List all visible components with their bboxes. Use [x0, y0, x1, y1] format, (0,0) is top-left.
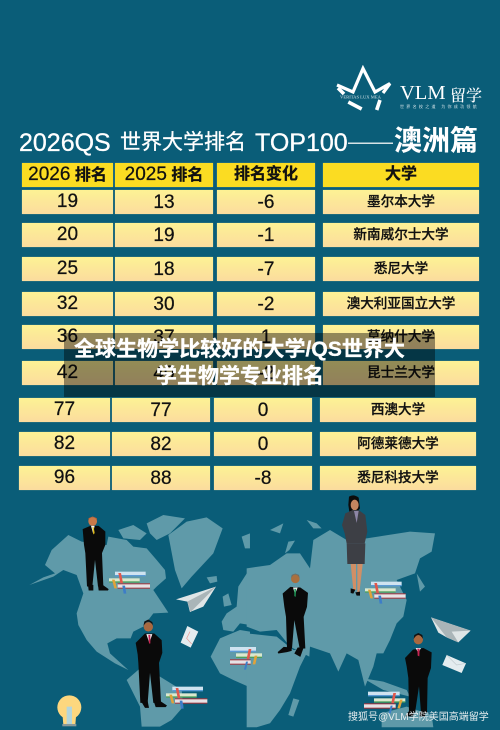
row: 澳大利亚国立大学: 30 [153, 294, 175, 315]
book stack 2 [166, 687, 207, 709]
overlay caption [64, 333, 435, 397]
row: 莫纳什大学: 37 [153, 327, 175, 348]
row: 澳大利亚国立大学: -2 [258, 294, 274, 315]
icon: light bulb [57, 695, 81, 726]
logo tagline: 世界名校之道 为你成功领航 [400, 104, 479, 109]
logo star mark [336, 65, 392, 111]
icon: envelope [442, 655, 466, 673]
row: 悉尼科技大学: 悉尼科技大学 [357, 470, 439, 485]
row: 悉尼大学: 悉尼大学 [374, 261, 428, 276]
icon: paper plane left [176, 587, 216, 612]
figure: man top left [83, 516, 109, 590]
row: 西澳大学: 0 [258, 400, 268, 421]
title: TOP100 [255, 129, 348, 157]
figure: woman [342, 495, 367, 596]
row: 墨尔本大学: 13 [153, 192, 175, 213]
logo star mark: VERITAS LUX MEA [340, 94, 382, 100]
row: 昆士兰大学: 40 [153, 363, 175, 384]
row: 西澳大学: 西澳大学 [371, 402, 425, 417]
row: 阿德莱德大学: 0 [258, 434, 268, 455]
row: 悉尼大学: 18 [153, 259, 175, 280]
row: 悉尼科技大学: 96 [54, 467, 75, 488]
table header: 2025 排名 [125, 164, 203, 185]
title: 世界大学排名 [120, 131, 246, 154]
book stack 4 [365, 582, 406, 604]
row: 西澳大学 [18, 398, 476, 422]
row: 澳大利亚国立大学 [22, 292, 480, 316]
overlay caption: 全球生物学比较好的大学/QS世界大 [74, 338, 405, 361]
row: 悉尼大学: -7 [258, 259, 274, 280]
book stack 5 [364, 692, 405, 714]
row: 西澳大学: 77 [150, 400, 172, 421]
table header: 大学 [385, 166, 417, 183]
row: 昆士兰大学: -2 [258, 363, 274, 384]
logo: VLM [336, 65, 482, 111]
row: 莫纳什大学: 莫纳什大学 [367, 329, 435, 344]
row: 阿德莱德大学: 82 [150, 434, 172, 455]
title: 2026QS [19, 129, 111, 157]
row: 新南威尔士大学: 20 [57, 224, 78, 245]
row: 昆士兰大学: 昆士兰大学 [367, 365, 435, 380]
watermark: 搜狐号@VLM学院美国高端留学 [348, 712, 489, 723]
row: 悉尼科技大学 [18, 466, 476, 490]
row: 悉尼大学: 25 [57, 258, 78, 279]
row: 阿德莱德大学: 阿德莱德大学 [357, 436, 439, 451]
row: 墨尔本大学 [22, 190, 480, 214]
row: 悉尼科技大学: -8 [255, 468, 271, 489]
row: 新南威尔士大学: 19 [153, 225, 175, 246]
map: world continents [29, 515, 435, 727]
table header: 2026 排名 [28, 164, 107, 185]
title: —— [348, 129, 393, 154]
row: 莫纳什大学 [22, 324, 480, 350]
row: 澳大利亚国立大学: 32 [57, 293, 78, 314]
icon: paper plane right [431, 617, 471, 642]
row: 昆士兰大学: 42 [57, 362, 78, 383]
row: 阿德莱德大学 [18, 432, 476, 456]
figure: man bottom right [405, 633, 432, 716]
row: 昆士兰大学 [22, 360, 480, 386]
book stack 1 [109, 572, 150, 594]
title [19, 125, 478, 157]
row: 墨尔本大学: 墨尔本大学 [367, 194, 435, 209]
table header: 排名变化 [234, 166, 298, 183]
row: 悉尼科技大学: 88 [150, 468, 172, 489]
row: 莫纳什大学: 36 [57, 326, 78, 347]
logo wordmark: VLM [400, 82, 446, 104]
row: 新南威尔士大学 [22, 222, 480, 248]
table header [22, 162, 480, 188]
overlay caption: 学生物学专业排名 [156, 365, 324, 388]
row: 新南威尔士大学: -1 [258, 225, 274, 246]
figure: man centre [278, 574, 308, 657]
row: 澳大利亚国立大学: 澳大利亚国立大学 [347, 296, 455, 311]
row: 新南威尔士大学: 新南威尔士大学 [353, 227, 449, 242]
title: 澳洲篇 [394, 125, 478, 156]
row: 悉尼大学 [22, 256, 480, 282]
logo wordmark chinese: 留学 [450, 83, 482, 106]
row: 莫纳什大学: 1 [261, 327, 271, 348]
icon: paper note [181, 626, 198, 648]
row: 墨尔本大学: -6 [258, 192, 274, 213]
book stack 3 [230, 647, 262, 670]
figure: man bottom left [136, 620, 167, 708]
row: 墨尔本大学: 19 [57, 191, 78, 212]
row: 阿德莱德大学: 82 [54, 433, 75, 454]
row: 西澳大学: 77 [54, 399, 75, 420]
